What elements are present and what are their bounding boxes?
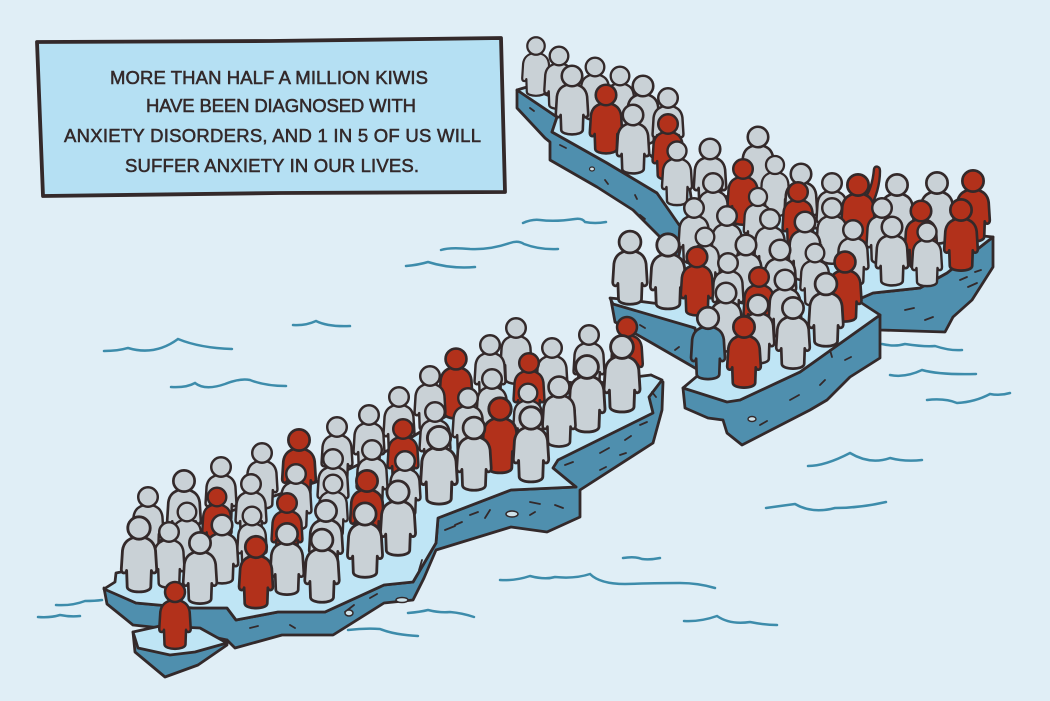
callout box with statistic: HAVE BEEN DIAGNOSED WITH [146, 95, 416, 116]
map: northland [517, 87, 700, 262]
crowd: north island [522, 37, 990, 388]
map: stewart island [133, 626, 227, 677]
callout box with statistic: MORE THAN HALF A MILLION KIWIS [110, 67, 428, 88]
map: north island top surface [610, 190, 993, 425]
callout box with statistic [37, 38, 505, 196]
callout box with statistic: SUFFER ANXIETY IN OUR LIVES. [125, 155, 419, 176]
crowd: south island [121, 317, 643, 649]
map: south island [104, 375, 663, 648]
water waves [38, 219, 1010, 636]
callout box with statistic: ANXIETY DISORDERS, AND 1 IN 5 OF US WILL [64, 125, 481, 146]
map: north island sides [611, 237, 993, 445]
